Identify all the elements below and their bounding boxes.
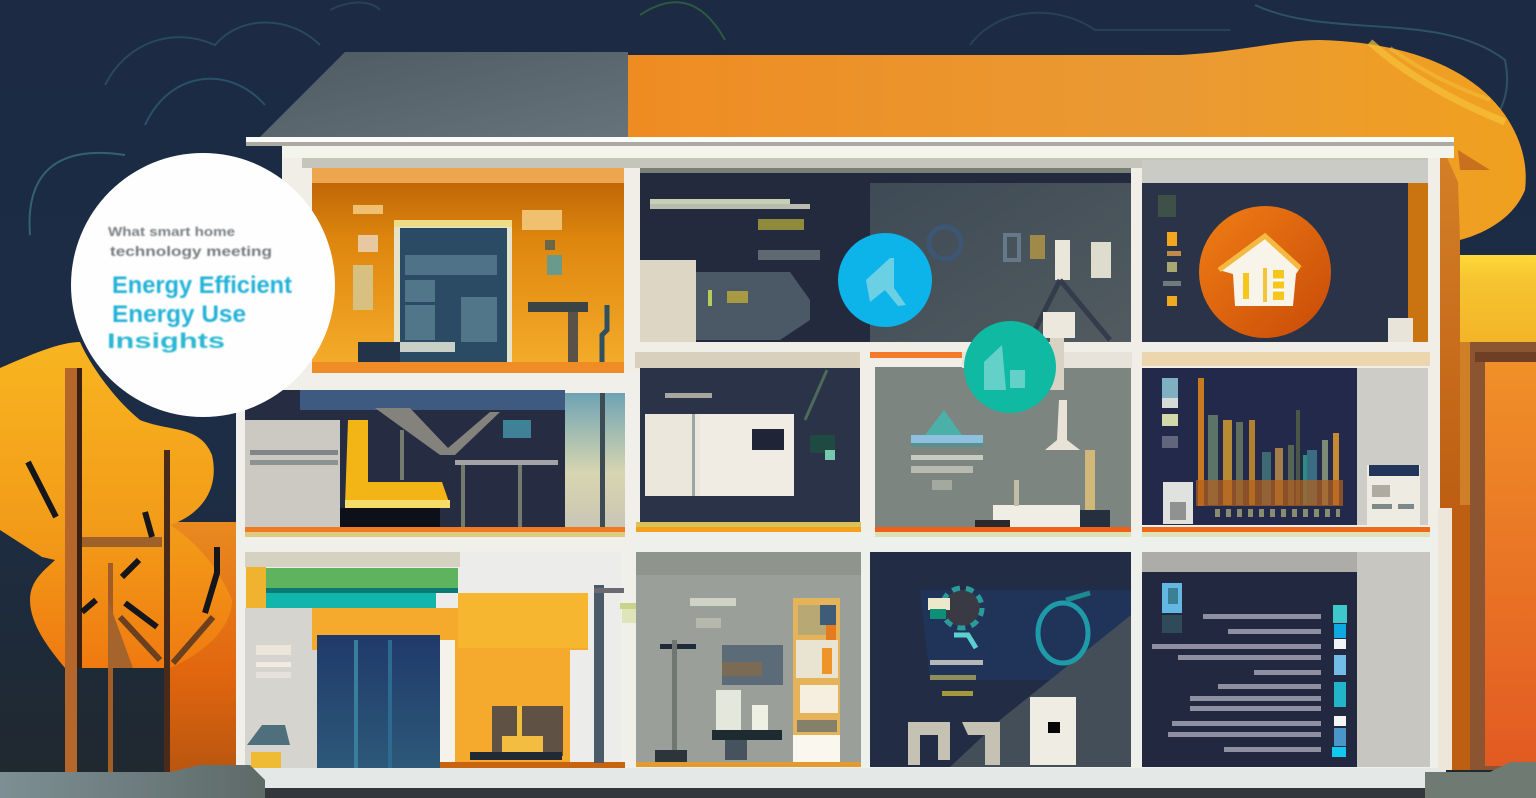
foundation strip — [265, 788, 1536, 798]
callout text: Energy Use — [112, 301, 246, 328]
tree — [0, 342, 236, 773]
callout text: technology meeting — [110, 243, 272, 259]
room: top left orange — [312, 168, 624, 373]
icon: star gear — [928, 588, 982, 648]
callout circle — [71, 153, 335, 417]
plant pot — [247, 725, 290, 778]
icon column — [1332, 605, 1347, 757]
callout text: What smart home — [108, 224, 235, 239]
drain pipe — [1438, 508, 1452, 770]
window — [394, 220, 512, 363]
room: study with bookshelf — [636, 552, 861, 767]
bookshelf — [793, 598, 840, 763]
icon: teal badge — [964, 321, 1056, 413]
side building right — [1440, 150, 1536, 770]
house body — [236, 137, 1454, 772]
room: living room with chair — [245, 390, 625, 537]
floor slab — [236, 768, 1446, 788]
icon: orange house badge — [1199, 206, 1331, 338]
bar chart — [1196, 378, 1343, 513]
room: list panel — [1142, 552, 1430, 767]
callout text: Energy Efficient — [112, 272, 292, 299]
text lines — [1152, 614, 1321, 752]
callout text — [107, 224, 292, 353]
room: dark tech room — [870, 552, 1131, 767]
room: top middle dark — [640, 168, 1131, 342]
ground stones right — [1425, 762, 1536, 798]
room: kitchen cabinet — [635, 352, 861, 532]
ground stones left — [0, 765, 265, 798]
roof — [260, 40, 1526, 240]
icon list — [1158, 195, 1181, 306]
icon: blue badge — [838, 233, 932, 327]
decorative sky curves — [30, 2, 1507, 235]
room: top right with house badge — [1142, 160, 1428, 342]
room: entrance with awning — [245, 552, 650, 768]
room: grey lounge — [870, 312, 1132, 537]
callout text: Insights — [107, 330, 225, 353]
room: bar chart — [1142, 352, 1430, 537]
